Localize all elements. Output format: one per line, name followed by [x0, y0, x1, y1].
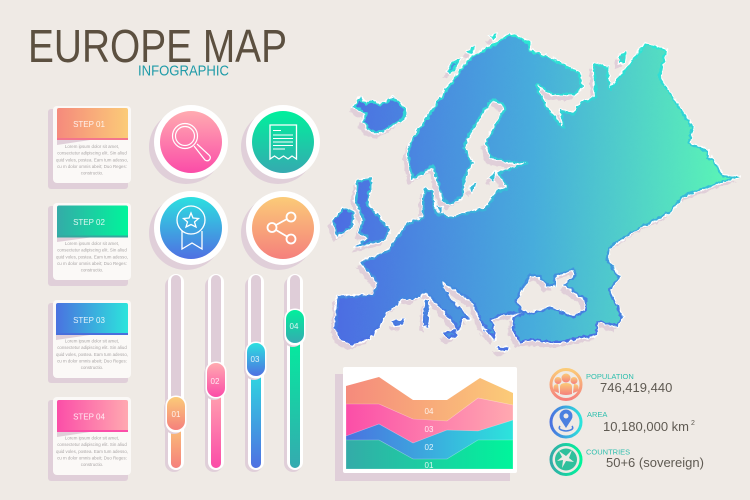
title: EUROPE MAP [28, 20, 287, 72]
panel: step 03: STEP 03 [73, 316, 105, 325]
panel: step 02: consectetur adipiscing elit. Sin aliud [57, 248, 127, 253]
icon: share badge [241, 191, 320, 270]
icon: magnifier badge [149, 105, 228, 184]
panel: step 02: cu m dolor omnis abeit; Duo Reges: [57, 261, 127, 266]
slider 02: 02 [211, 377, 220, 386]
area chart [335, 367, 517, 481]
slider 04 [283, 274, 306, 472]
panel: step 03 [48, 300, 131, 383]
icon: award ribbon badge [149, 191, 228, 270]
slider 01: 01 [172, 410, 181, 419]
stat: countries [551, 444, 704, 474]
area chart: 01 [425, 461, 434, 470]
icon: receipt badge [241, 105, 320, 184]
area chart: 03 [425, 425, 434, 434]
panel: step 04: Lorem ipsum dolor sit amet, [65, 436, 119, 440]
panel: step 01: cu m dolor omnis abeit; Duo Reges: [57, 164, 127, 169]
subtitle: INFOGRAPHIC [138, 62, 229, 80]
slider 02 [204, 274, 226, 472]
stat: area: 2 [691, 420, 695, 427]
panel: step 01 [48, 106, 131, 189]
panel: step 04: cu m dolor omnis abeit; Duo Reges: [57, 456, 127, 460]
area chart: 04 [425, 407, 434, 416]
stat: countries: 50+6 (sovereign) [606, 455, 704, 470]
panel: step 04: quid voles, postea. Eam tum adesso, [56, 449, 128, 454]
slider 04: 04 [290, 322, 299, 331]
panel: step 02: constructio. [81, 268, 103, 273]
panel: step 04: constructio. [81, 462, 103, 467]
slider 03 [244, 274, 266, 472]
stat: area: AREA [587, 410, 607, 419]
slider 01 [164, 274, 186, 472]
panel: step 01: constructio. [81, 171, 103, 176]
panel: step 01: consectetur adipiscing elit. Sin aliud [57, 151, 127, 156]
panel: step 01: Lorem ipsum dolor sit amet, [65, 144, 119, 149]
panel: step 01: quid voles, postea. Eam tum adesso, [56, 157, 128, 162]
slider 03: 03 [251, 355, 260, 364]
panel: step 04: consectetur adipiscing elit. Sin aliud [57, 442, 127, 447]
area chart: 02 [425, 443, 434, 452]
stat: population: POPULATION [586, 372, 634, 381]
stat: area: 10,180,000 km [603, 419, 689, 434]
stat: population: 746,419,440 [600, 380, 672, 395]
panel: step 03: Lorem ipsum dolor sit amet, [65, 338, 119, 344]
panel: step 02: quid voles, postea. Eam tum adesso, [56, 254, 128, 259]
map of Europe [328, 33, 740, 356]
panel: step 02: Lorem ipsum dolor sit amet, [65, 241, 119, 246]
panel: step 03: constructio. [81, 365, 103, 370]
panel: step 03: consectetur adipiscing elit. Sin aliud [57, 345, 127, 350]
stat: area [551, 407, 695, 437]
panel: step 02 [48, 203, 131, 286]
panel: step 04: STEP 04 [73, 412, 105, 422]
panel: step 03: quid voles, postea. Eam tum adesso, [56, 352, 128, 357]
stat: countries: COUNTRIES [586, 448, 630, 456]
panel: step 02: STEP 02 [73, 218, 105, 227]
panel: step 03: cu m dolor omnis abeit; Duo Reges: [57, 358, 127, 364]
stat: population [551, 370, 672, 400]
panel: step 04 [48, 397, 131, 481]
panel: step 01: STEP 01 [73, 120, 105, 129]
